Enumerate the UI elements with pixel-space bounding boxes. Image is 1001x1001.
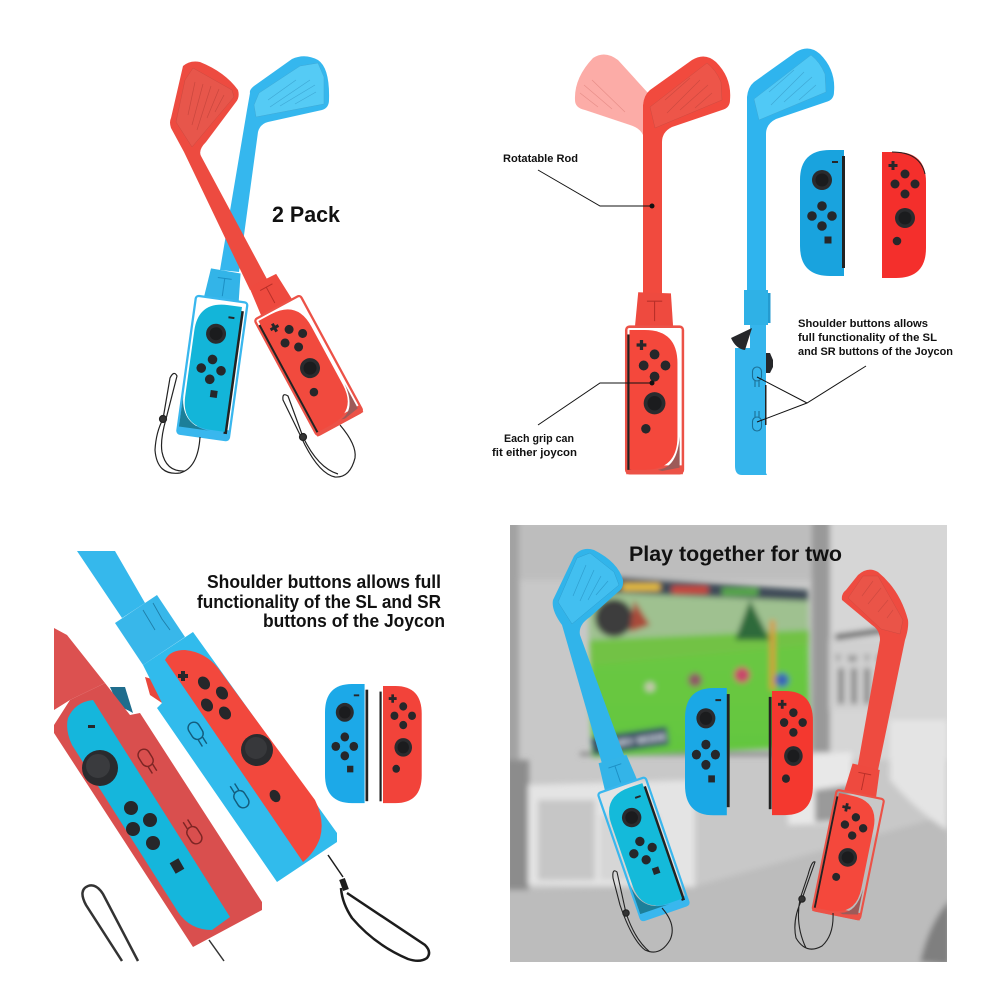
blue grip close-up bbox=[77, 551, 337, 882]
panel: close-up of grips bbox=[54, 551, 445, 961]
callout: each grip: fit either joycon bbox=[492, 447, 577, 459]
red club bbox=[643, 56, 730, 300]
heading: shoulder buttons bbox=[197, 572, 445, 631]
callout: each grip bbox=[492, 380, 654, 459]
blue joycon in grip bbox=[177, 267, 252, 440]
center red joycon bbox=[769, 691, 813, 815]
heading: shoulder buttons: Shoulder buttons allows full bbox=[207, 572, 441, 592]
photo background: STORY MODE bbox=[600, 732, 668, 752]
blue club bbox=[553, 549, 625, 767]
red grip close-up bbox=[54, 628, 262, 947]
left strap bbox=[613, 871, 672, 952]
panel: play together bbox=[505, 520, 960, 970]
blue club side view bbox=[731, 48, 834, 475]
callout: rotatable rod bbox=[503, 153, 654, 208]
standalone blue joycon bbox=[800, 150, 845, 276]
heading: shoulder buttons: buttons of the Joycon bbox=[263, 611, 445, 631]
label: 2 Pack: 2 Pack bbox=[272, 202, 341, 227]
red club bbox=[842, 570, 908, 775]
standalone red joycon bbox=[882, 152, 926, 278]
right strap bbox=[795, 862, 833, 949]
small blue joycon bbox=[325, 684, 368, 803]
panel: club features bbox=[492, 48, 953, 475]
callout: each grip: Each grip can bbox=[504, 433, 574, 445]
shoulder button slots bbox=[752, 367, 762, 431]
red grip with joycon bbox=[626, 292, 683, 474]
panel: 2 pack clubs bbox=[155, 56, 363, 477]
heading: shoulder buttons: functionality of the SL and SR bbox=[197, 592, 441, 612]
blue wrist strap bbox=[155, 373, 200, 473]
callout: rotatable rod: Rotatable Rod bbox=[503, 153, 578, 165]
red wrist strap bbox=[283, 395, 355, 477]
black strap bbox=[328, 855, 429, 961]
blue golf club bbox=[220, 56, 329, 272]
callout: shoulder buttons bbox=[757, 318, 953, 422]
photo background: T W T M bbox=[835, 654, 885, 665]
red joycon in grip bbox=[812, 761, 890, 921]
rotated ghost club head bbox=[575, 54, 650, 135]
red golf club bbox=[170, 62, 268, 290]
red joycon in grip bbox=[240, 268, 363, 437]
callout: shoulder buttons: full functionality of the SL bbox=[798, 332, 937, 344]
grey strap bbox=[82, 885, 224, 961]
blue joycon in grip bbox=[589, 750, 689, 921]
center blue joycon bbox=[685, 688, 730, 815]
heading: play together: Play together for two bbox=[629, 543, 842, 566]
photo background bbox=[505, 520, 960, 970]
callout: shoulder buttons: and SR buttons of the Joycon bbox=[798, 346, 953, 358]
callout: shoulder buttons: Shoulder buttons allows bbox=[798, 318, 928, 330]
small red joycon bbox=[379, 686, 422, 803]
